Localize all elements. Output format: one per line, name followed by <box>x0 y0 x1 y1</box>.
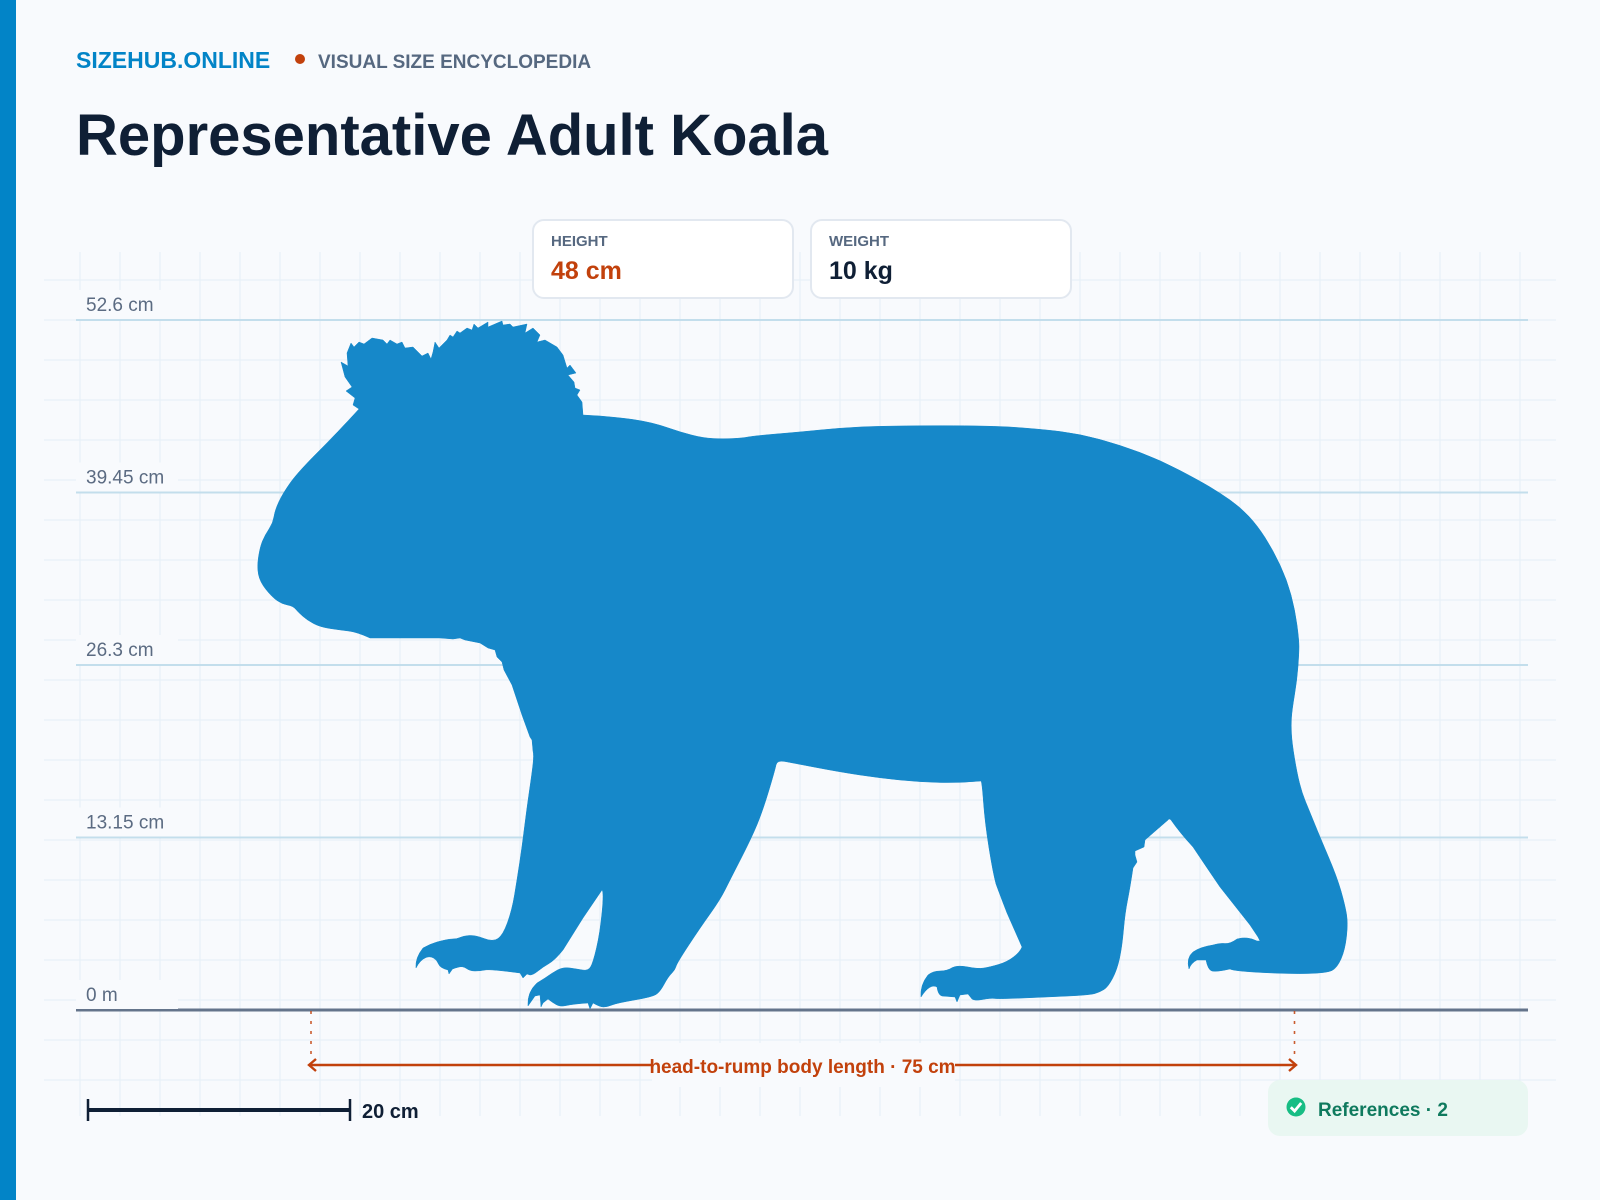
length measure: dotted guides <box>311 1011 1294 1060</box>
card: height: 48 cm <box>551 257 622 285</box>
length measure: arrow <box>309 1059 1296 1071</box>
card: weight: WEIGHT <box>829 233 889 250</box>
axis labels: 26.3 cm <box>86 640 154 661</box>
axis labels: 13.15 cm <box>86 812 164 834</box>
axis labels: 39.45 cm <box>86 468 164 488</box>
koala silhouette <box>258 321 1347 1009</box>
brand: SIZEHUB.ONLINE <box>76 47 270 73</box>
ground line <box>76 1008 1528 1012</box>
axis labels: 0 m <box>86 985 118 1006</box>
card: weight: 10 kg <box>829 257 893 285</box>
axis labels: 52.6 cm <box>86 295 154 316</box>
axis labels <box>86 295 164 1006</box>
references badge <box>1268 1080 1528 1136</box>
title: Representative Adult Koala <box>76 103 828 168</box>
scale label: 20 cm <box>362 1101 419 1123</box>
card: height: HEIGHT <box>551 233 608 250</box>
icon: check <box>1286 1098 1306 1116</box>
card: weight <box>810 219 1072 299</box>
brand dot <box>295 54 305 64</box>
scale bar <box>88 1099 350 1121</box>
card: height <box>532 219 794 299</box>
accent bar <box>0 0 16 1200</box>
length label: head-to-rump body length · 75 cm <box>649 1057 956 1078</box>
tagline: VISUAL SIZE ENCYCLOPEDIA <box>318 52 591 73</box>
references text: References · 2 <box>1318 1100 1448 1121</box>
